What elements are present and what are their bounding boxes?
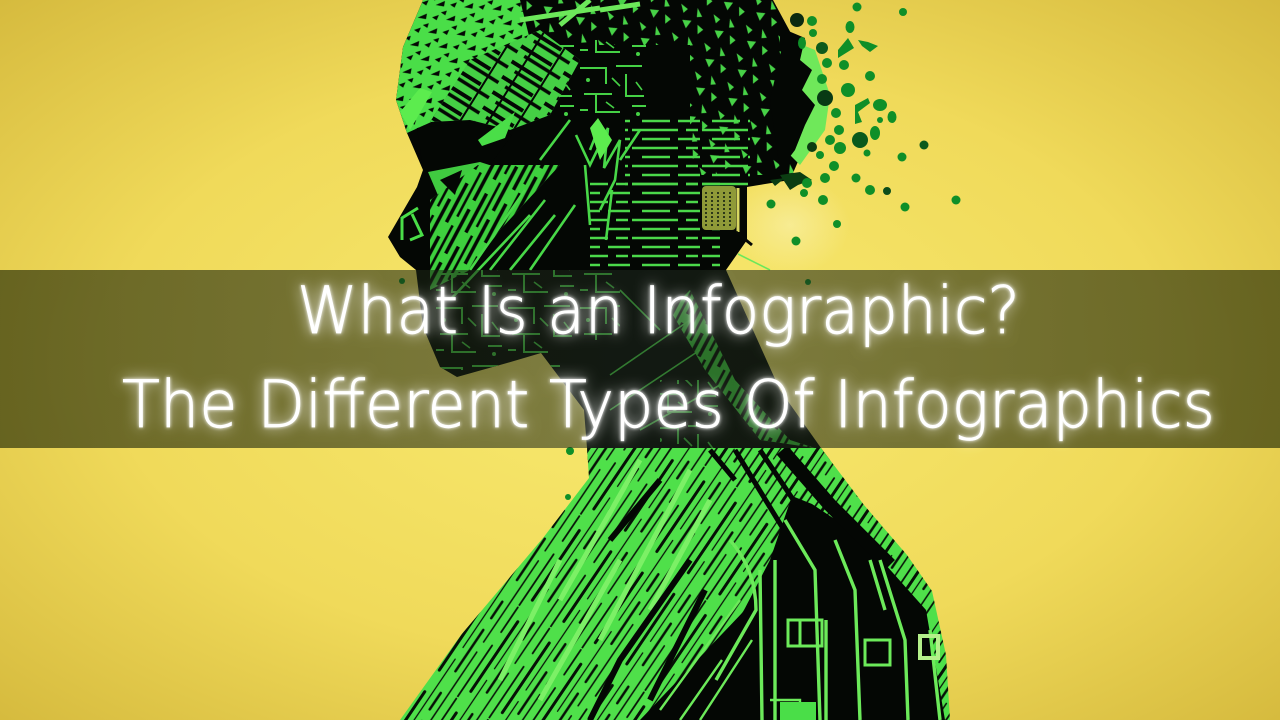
jaw and neck in banner bbox=[430, 270, 815, 450]
head: central horizontal traces bbox=[625, 120, 750, 186]
face: bright forehead bbox=[396, 0, 640, 133]
mouth: black with green glyph bbox=[402, 208, 422, 240]
ear device bbox=[702, 186, 770, 270]
pale halo behind head bbox=[730, 175, 850, 275]
head base bbox=[380, 0, 830, 460]
body: green strands bbox=[400, 448, 960, 720]
title banner bbox=[0, 270, 1280, 448]
face: cheek green bbox=[428, 162, 560, 290]
title line 2: The Different Types Of Infographics bbox=[122, 368, 1215, 443]
face: lower cheek diagonal traces bbox=[450, 120, 640, 300]
dissolving particles bbox=[399, 2, 960, 500]
title line 1: What Is an Infographic? bbox=[297, 274, 1020, 349]
face: eye socket bbox=[417, 128, 423, 170]
head: right dissolving mass bbox=[690, 45, 794, 175]
head: upper band circuitry bbox=[526, 0, 780, 45]
figure: clipped to silhouette bbox=[380, 0, 960, 720]
body: black circuit back bbox=[640, 450, 945, 720]
dissolving fragments at head edge bbox=[770, 30, 830, 190]
